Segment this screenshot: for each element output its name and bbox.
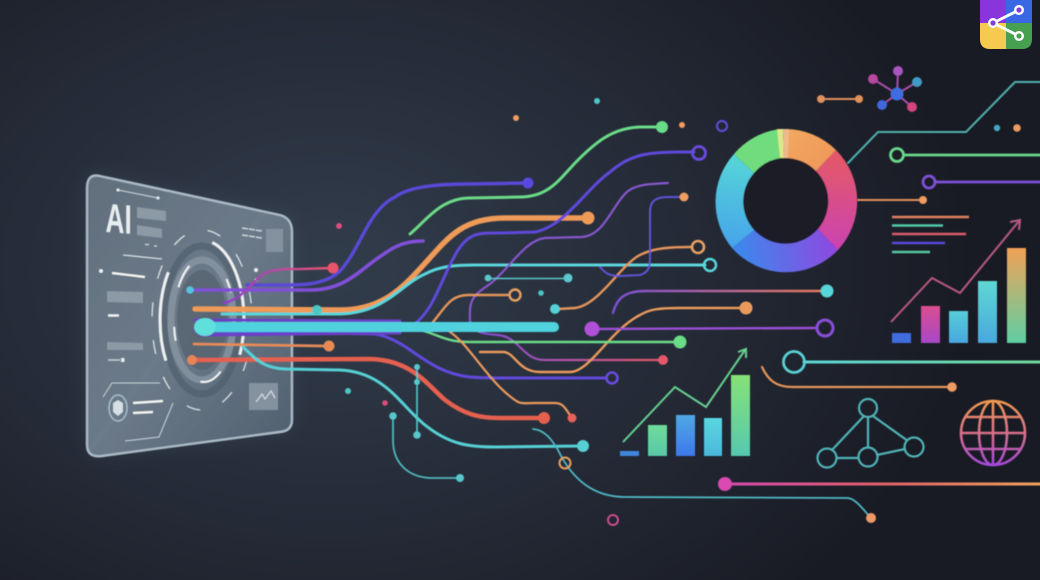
scattered dots: [336, 98, 1021, 525]
teal polyline: [848, 82, 1040, 163]
line: thick red: [192, 359, 544, 418]
line: red pink: [224, 268, 333, 303]
line: thin violet: [470, 183, 668, 321]
line: blue violet long: [412, 152, 694, 326]
ring: violet: [692, 146, 706, 160]
line: cyan teal: [222, 265, 705, 314]
line: thin violet beam: [195, 320, 400, 335]
line: thick orange: [195, 218, 587, 310]
orange donut lead: [858, 199, 923, 201]
top-right network icon: [868, 66, 922, 112]
icon: globe: [961, 401, 1025, 465]
panel details: AI: [106, 196, 132, 243]
connector lines right: [718, 82, 1040, 491]
icon: share logo: [980, 0, 1032, 49]
line: cyan curve: [393, 416, 460, 478]
ring: orange upper: [692, 241, 704, 253]
icon: node graph: [818, 399, 924, 468]
panel: AI glass screen: [87, 176, 292, 456]
line: purple to ring: [592, 328, 815, 329]
line: teal bottom: [533, 429, 871, 518]
data stream lines: [186, 121, 876, 523]
panel details: [99, 188, 283, 441]
purple ring line: [936, 181, 1040, 183]
line: violet orange: [613, 291, 820, 313]
line: orange from cyan dot: [558, 247, 692, 309]
line: thick cyan: [208, 322, 554, 332]
line: cyan short: [488, 278, 568, 280]
line: orange long: [480, 308, 746, 372]
donut chart: [716, 129, 857, 272]
orange dumbbell: [821, 98, 859, 100]
line: blue loop: [600, 197, 683, 276]
green ring line: [904, 154, 1040, 156]
cyan ring line: [804, 360, 1040, 364]
orange curve: [762, 367, 950, 387]
bar chart: center: [620, 349, 750, 456]
text lines legend: [892, 217, 969, 252]
line: orange lower in panel: [194, 344, 325, 346]
line: orange to ring: [433, 295, 508, 322]
ring: orange: [510, 290, 520, 300]
beam head: [194, 318, 216, 336]
line: top blue: [247, 183, 527, 285]
line: thin magenta: [470, 321, 663, 360]
line: cyan lower: [243, 347, 580, 447]
magenta orange line: [725, 482, 1040, 486]
rings: [152, 230, 252, 410]
line: violet from panel: [192, 241, 423, 290]
line: orange down: [450, 332, 572, 418]
line: green: [420, 330, 678, 342]
line: blue violet lower: [195, 331, 606, 378]
line: top green: [410, 127, 662, 234]
ring: cyan top: [704, 259, 716, 271]
bar chart: right: [891, 220, 1026, 343]
line: vertical cyan: [416, 367, 418, 435]
